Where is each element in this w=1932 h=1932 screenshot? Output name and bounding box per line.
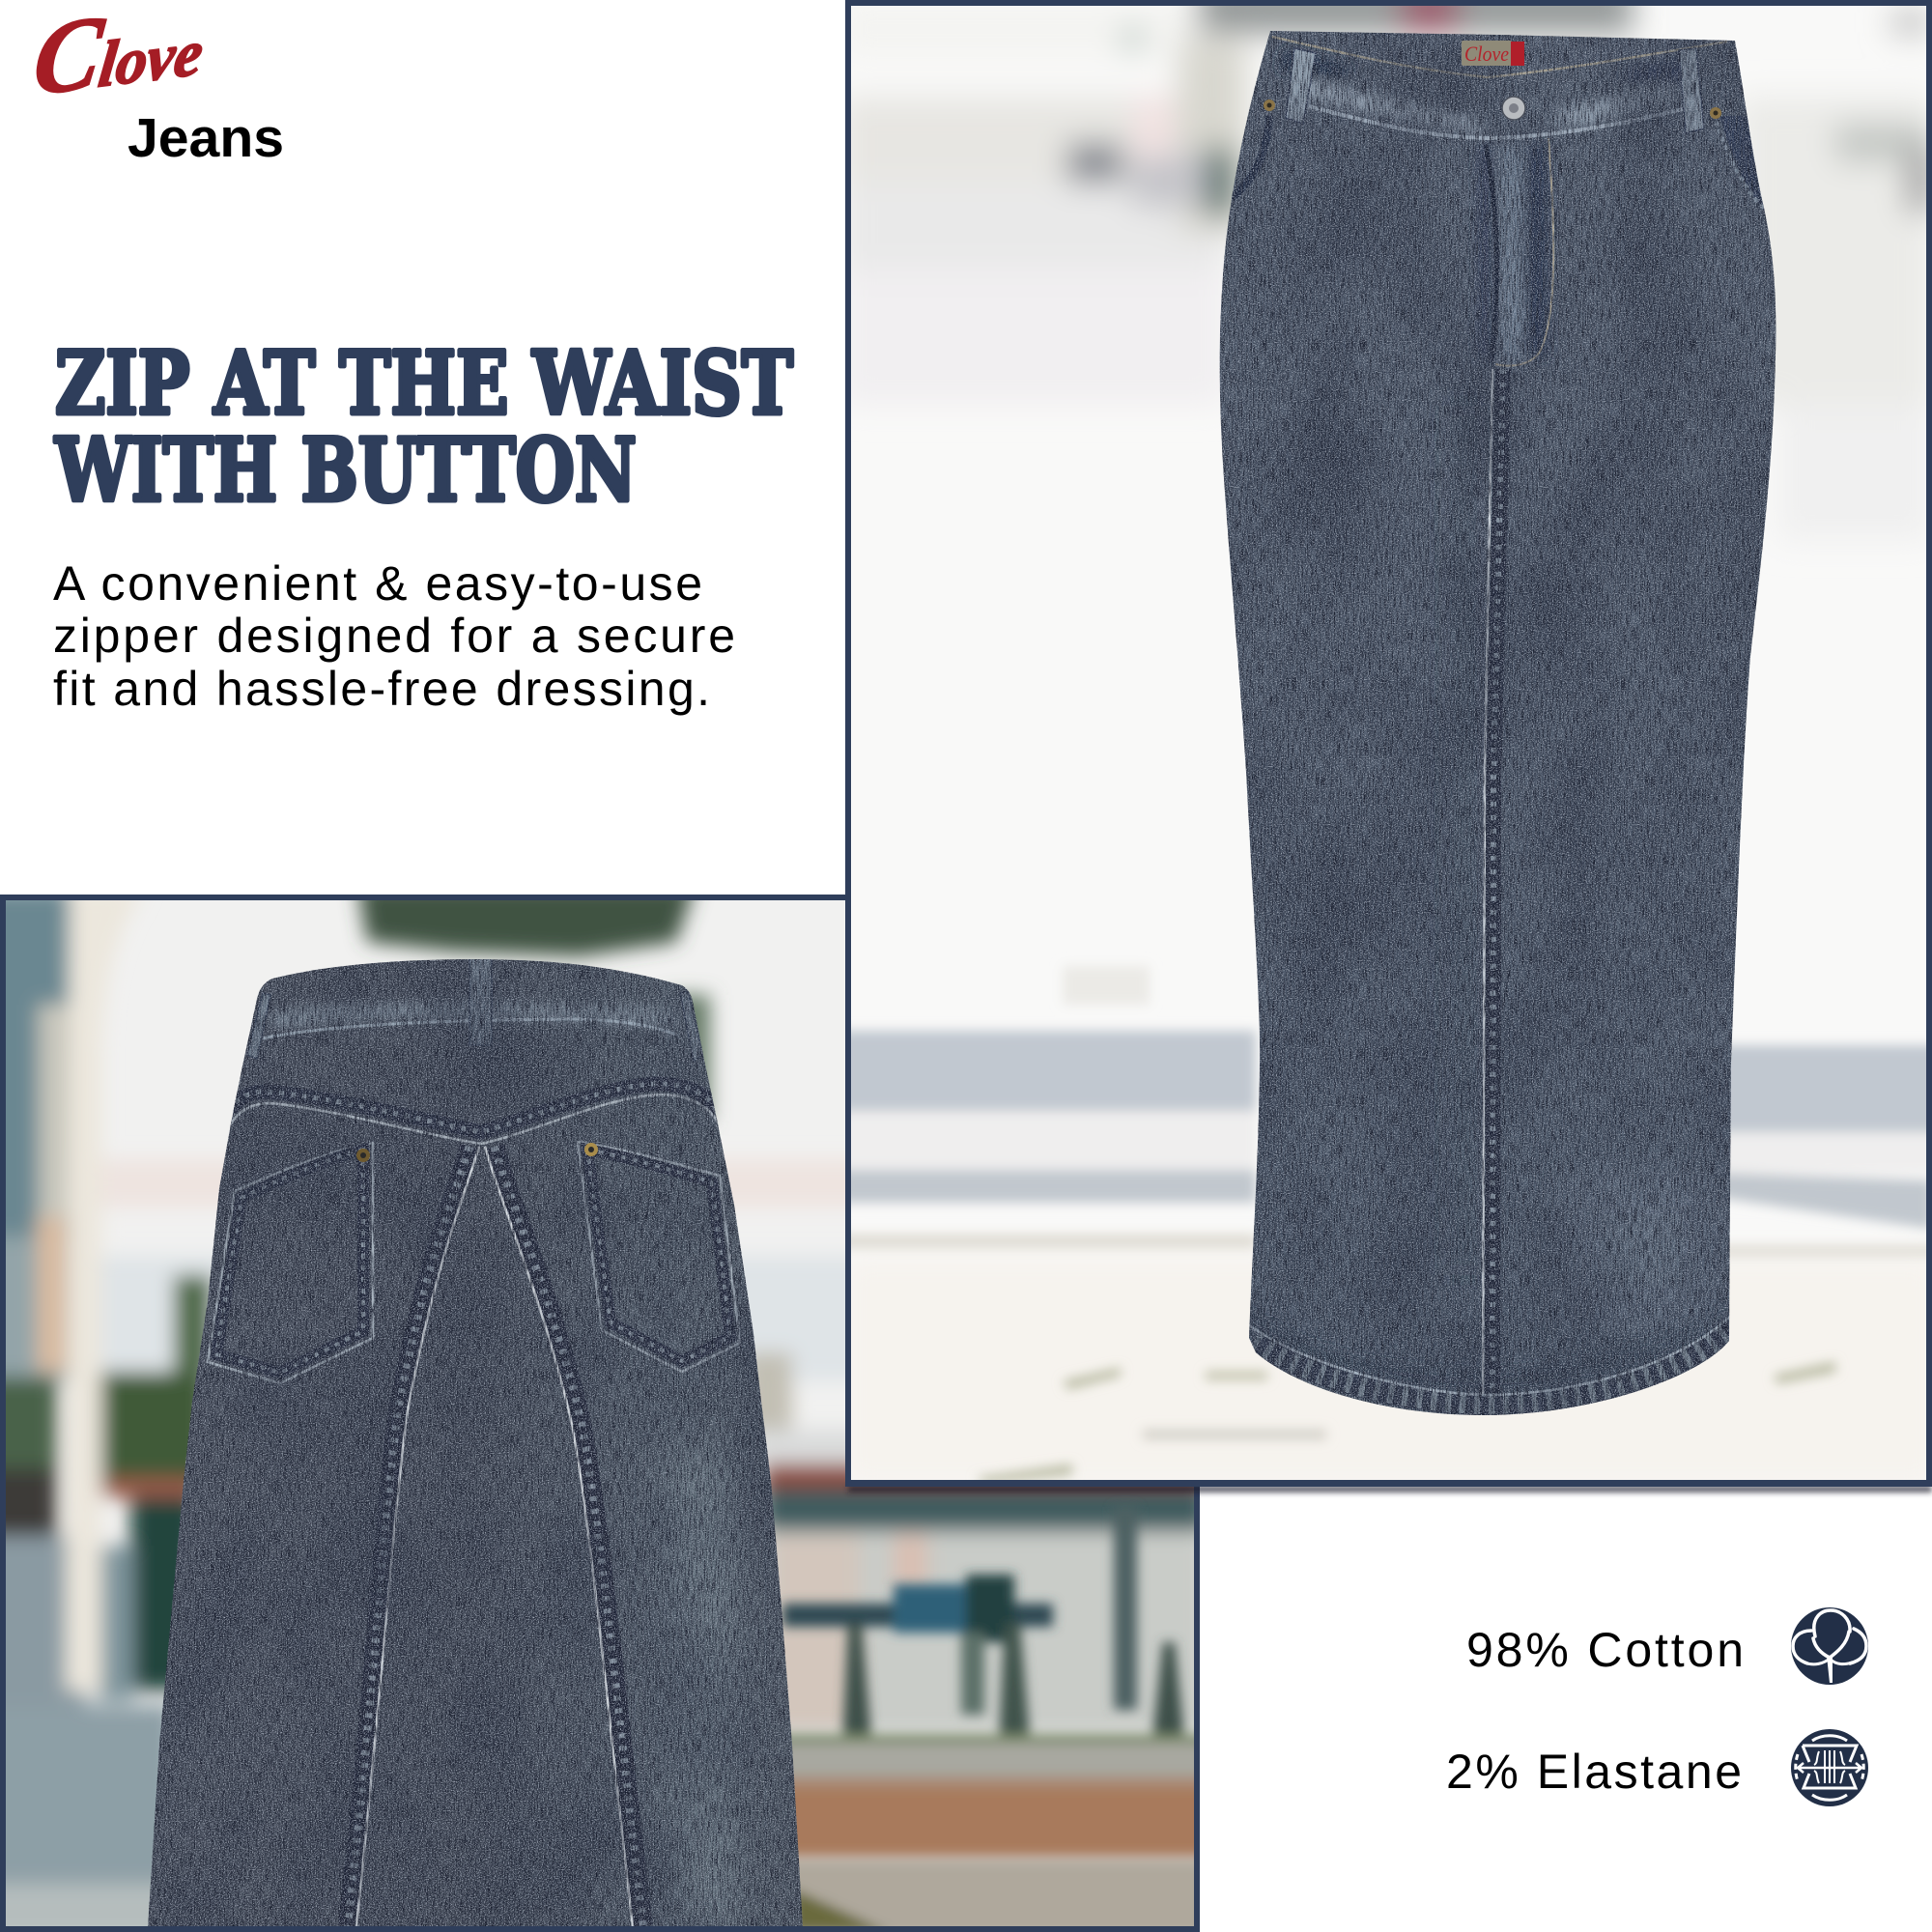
heading: ZIP AT THE WAIST: [55, 332, 793, 435]
body text: fit and hassle-free dressing.: [53, 662, 710, 716]
blurred background: back view: [0, 884, 1208, 1932]
panel seams: [348, 1147, 643, 1926]
panel: back view photo: [0, 884, 1208, 1932]
body text: zipper designed for a secure: [53, 609, 735, 663]
panel: front view photo: [840, 0, 1932, 1492]
rivet: front right: [1710, 107, 1721, 119]
logo word: Jeans: Jeans: [128, 107, 284, 169]
icon: cotton boll: [1791, 1607, 1868, 1685]
inner waist back: [1270, 31, 1735, 79]
frame: front view: [845, 0, 1932, 1487]
washed waistband and hem shading: [1246, 48, 1734, 1391]
body text: A convenient & easy-to-use: [53, 556, 702, 611]
frame shadow: [848, 1486, 1932, 1492]
rivet: left pocket: [356, 1149, 370, 1162]
label: 2% Elastane: 2% Elastane: [1446, 1745, 1742, 1799]
rivet: right pocket: [584, 1143, 598, 1156]
fabric item: cotton: [1466, 1607, 1868, 1685]
body text: [53, 556, 735, 716]
pocket interior: [1719, 116, 1768, 214]
belt loops: front: [1286, 48, 1704, 133]
waistband seam: [263, 1019, 678, 1038]
belt loops: [247, 954, 703, 1061]
heading: [54, 332, 793, 522]
frame: back view: [0, 895, 1200, 1932]
logo: Clove Jeans: [28, 0, 284, 169]
heading: WITH BUTTON: [54, 419, 637, 522]
centre seam: [1483, 369, 1503, 1415]
skirt: front view: [1208, 24, 1787, 1420]
yoke seam: [231, 1084, 717, 1132]
skirt: back view: [135, 952, 811, 1932]
waistband seams: [1232, 37, 1766, 211]
waistband shading: [270, 1003, 676, 1028]
icon: elastic weave: [1791, 1729, 1868, 1806]
fly placket: [1495, 138, 1553, 366]
pockets: [208, 1142, 740, 1383]
hem stitching: [1249, 1316, 1731, 1405]
label: 98% Cotton: 98% Cotton: [1466, 1623, 1744, 1677]
blurred background: front view: [840, 0, 1932, 1488]
rivet: front left: [1264, 99, 1275, 111]
button: [1502, 97, 1525, 120]
label: Clove: Clove: [1464, 42, 1509, 66]
fabric item: elastane: [1446, 1729, 1868, 1806]
